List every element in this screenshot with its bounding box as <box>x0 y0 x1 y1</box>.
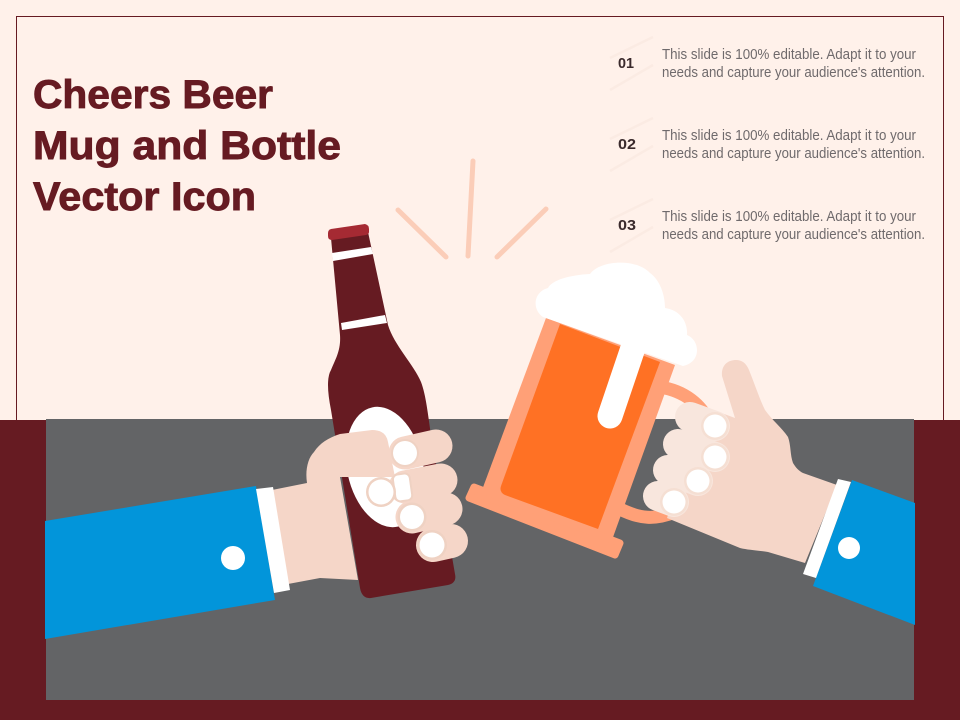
left shirt cuff <box>256 487 290 593</box>
left cuff button <box>221 546 245 570</box>
finger 2 <box>405 480 441 487</box>
clink spark lines <box>398 161 546 257</box>
mug base <box>469 487 620 555</box>
list item 01: This slide is 100% editable. Adapt it to your <box>662 47 916 63</box>
list item 03: 03 <box>618 217 636 234</box>
right cuff button <box>838 537 860 559</box>
beer mug <box>469 263 710 555</box>
finger 1 <box>405 446 436 453</box>
list item 01: needs and capture your audience's attention. <box>662 65 925 81</box>
list item 03: needs and capture your audience's attention. <box>662 227 925 243</box>
finger 4 <box>658 496 674 502</box>
right shirt cuff <box>803 479 851 578</box>
finger 3 <box>668 470 698 481</box>
mug handle <box>620 388 710 517</box>
beer bottle <box>328 224 455 598</box>
beer fill <box>500 324 660 529</box>
finger 2 <box>678 444 715 457</box>
list item 02: 02 <box>618 136 636 153</box>
list item 02: needs and capture your audience's attention. <box>662 146 925 162</box>
title: Mug and Bottle <box>33 124 341 168</box>
bottle label <box>335 399 435 535</box>
finger 1 <box>690 417 715 426</box>
right arm sleeve <box>813 480 915 625</box>
list item 03: This slide is 100% editable. Adapt it to your <box>662 209 916 225</box>
list item 02: This slide is 100% editable. Adapt it to your <box>662 128 916 144</box>
list item 03 <box>610 199 925 252</box>
list item 01: 01 <box>618 55 634 72</box>
maroon table frame <box>0 420 960 720</box>
title: Vector Icon <box>33 175 256 219</box>
left hand <box>272 430 451 584</box>
title: Cheers Beer <box>33 73 273 117</box>
beer foam <box>536 263 697 416</box>
left arm sleeve <box>45 486 275 639</box>
finger 4 <box>433 541 451 545</box>
title <box>33 73 341 219</box>
finger 3 <box>412 509 446 517</box>
bottle cap <box>328 224 369 240</box>
right hand <box>658 360 837 563</box>
list item 01 <box>610 37 925 90</box>
list item 02 <box>610 118 925 171</box>
thumb nail <box>366 477 396 507</box>
grey table panel <box>46 419 914 700</box>
